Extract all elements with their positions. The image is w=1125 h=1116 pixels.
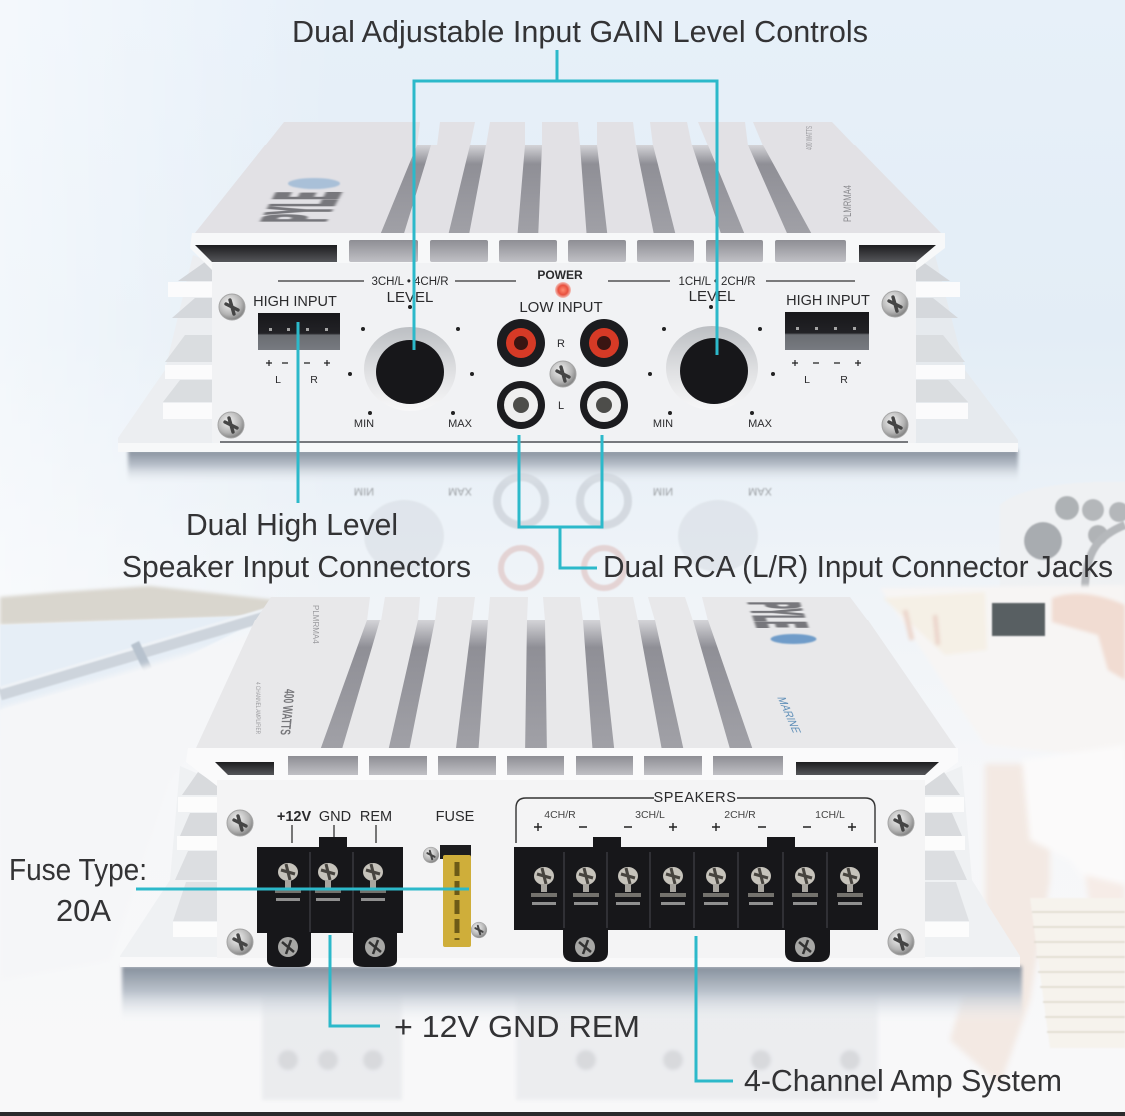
left heat-sink side bbox=[118, 255, 212, 450]
power labels: FUSE bbox=[436, 809, 475, 825]
label: power terminals: + 12V GND REM bbox=[394, 1009, 640, 1044]
amplifier: lower, terminal view bbox=[120, 597, 1022, 1022]
level headings: 1CH/L • 2CH/R bbox=[678, 276, 756, 288]
boat railing bbox=[0, 606, 277, 694]
right gain knob: MIN bbox=[653, 418, 673, 430]
front panel bbox=[212, 263, 916, 443]
cabin and seats bbox=[880, 585, 1125, 760]
level headings: LEVEL bbox=[387, 289, 433, 306]
helm switch panel bbox=[992, 603, 1045, 636]
finned top plate bbox=[196, 597, 956, 756]
reflection: upper amplifier: MIN bbox=[354, 485, 374, 497]
leader: power terminals bbox=[330, 935, 380, 1026]
level headings: LEVEL bbox=[689, 288, 735, 305]
shoreline bbox=[0, 586, 275, 625]
reflection: upper amplifier bbox=[354, 477, 773, 588]
level headings: POWER bbox=[537, 268, 583, 282]
panel screws bbox=[218, 291, 908, 438]
brand marks on upper plate: 400 WATTS bbox=[805, 126, 814, 150]
high input left: R bbox=[310, 374, 318, 386]
label: amp system: 4-Channel Amp System bbox=[744, 1063, 1062, 1098]
high input right: R bbox=[840, 374, 848, 386]
RCA jacks: R bbox=[557, 338, 565, 350]
finned top plate bbox=[195, 122, 941, 240]
base flange bbox=[120, 957, 1020, 967]
bottom border bbox=[0, 1112, 1125, 1116]
front panel bbox=[217, 780, 925, 958]
power labels: REM bbox=[360, 809, 392, 825]
dashboard gauges bbox=[1000, 482, 1125, 600]
label: high level inputs: Dual High Level bbox=[186, 507, 398, 542]
speaker bracket: 4CH/R bbox=[544, 809, 576, 821]
leader: speaker terminals bbox=[696, 936, 733, 1081]
right gain knob: MAX bbox=[748, 418, 773, 430]
power labels: +12V bbox=[277, 809, 311, 825]
brand marks on lower plate: MARINE bbox=[774, 697, 804, 733]
right heat-sink side bbox=[916, 255, 1018, 450]
leader: high level inputs bbox=[296, 322, 300, 503]
speaker terminal block bbox=[514, 837, 878, 962]
label: fuse type: Fuse Type: bbox=[9, 852, 147, 887]
reflection: upper amplifier: MAX bbox=[748, 485, 773, 497]
heading: gain controls: Dual Adjustable Input GAIN Level Controls bbox=[292, 14, 868, 49]
reflection: upper amplifier: MAX bbox=[448, 485, 473, 497]
fuse bbox=[423, 845, 487, 947]
base flange bbox=[118, 443, 1018, 452]
level headings: LOW INPUT bbox=[519, 299, 603, 316]
amplifier: upper, front panel view bbox=[118, 122, 1018, 484]
brand marks on lower plate: 400 WATTS bbox=[277, 689, 298, 735]
speaker bracket: 3CH/L bbox=[635, 809, 665, 821]
crew legs and shorts bbox=[950, 745, 1125, 1085]
speaker bracket: 1CH/L bbox=[815, 809, 845, 821]
power labels: GND bbox=[319, 809, 351, 825]
brand marks on upper plate bbox=[246, 126, 854, 222]
sea bbox=[0, 615, 270, 710]
right heat-sink side bbox=[925, 766, 1020, 966]
reflection: lower amplifier bbox=[262, 985, 878, 1100]
high input right: HIGH INPUT bbox=[786, 293, 870, 309]
power labels bbox=[277, 809, 475, 843]
brand marks on lower plate: PLMRMA4 bbox=[311, 605, 320, 644]
logo oval bbox=[770, 634, 816, 644]
power LED bbox=[555, 282, 571, 298]
high input left bbox=[253, 294, 340, 386]
label: RCA jacks: Dual RCA (L/R) Input Connector Jacks bbox=[603, 549, 1113, 584]
level headings bbox=[278, 268, 855, 316]
panel screws bbox=[227, 810, 914, 955]
reflection: upper amplifier: MIN bbox=[653, 485, 673, 497]
leader: RCA jacks bbox=[519, 435, 602, 568]
brand name: PYLE bbox=[246, 192, 359, 222]
label: high level inputs: Speaker Input Connectors bbox=[122, 549, 471, 584]
leader: gain level controls bbox=[414, 50, 717, 355]
label: fuse type: 20A bbox=[56, 893, 111, 928]
label: fuse type bbox=[9, 852, 147, 928]
label: high level inputs bbox=[122, 507, 471, 584]
shadow under upper amp bbox=[128, 450, 1018, 484]
high input left: L bbox=[275, 374, 281, 386]
front lip with slots bbox=[190, 233, 945, 270]
brand marks on lower plate bbox=[254, 602, 820, 735]
right gain knob bbox=[648, 305, 775, 430]
brand name: PYLE bbox=[735, 602, 820, 628]
high input right: L bbox=[804, 374, 810, 386]
shadow under lower amp bbox=[122, 966, 1022, 1022]
lower-left deck bbox=[0, 628, 275, 980]
speaker bracket: SPEAKERS bbox=[654, 790, 736, 806]
front lip with slots bbox=[186, 748, 958, 786]
brand marks on lower plate: 4 CHANNEL AMPLIFIER bbox=[254, 682, 261, 734]
RCA jacks bbox=[497, 319, 628, 429]
speaker bracket: 2CH/R bbox=[724, 809, 756, 821]
level headings: 3CH/L • 4CH/R bbox=[371, 276, 449, 288]
RCA jacks: L bbox=[558, 400, 564, 412]
left heat-sink side bbox=[120, 766, 217, 966]
high input right bbox=[785, 293, 870, 386]
left gain knob: MAX bbox=[448, 418, 473, 430]
high input left: HIGH INPUT bbox=[253, 294, 337, 310]
left gain knob: MIN bbox=[354, 418, 374, 430]
speaker bracket bbox=[516, 790, 875, 843]
leader: fuse type bbox=[136, 888, 469, 890]
deck boards bbox=[1030, 898, 1125, 1048]
brand marks on upper plate: PLMRMA4 bbox=[842, 185, 854, 222]
helmsman hand bbox=[1052, 594, 1125, 680]
power terminal block bbox=[257, 837, 403, 967]
logo oval bbox=[288, 178, 340, 189]
left gain knob bbox=[348, 305, 474, 430]
